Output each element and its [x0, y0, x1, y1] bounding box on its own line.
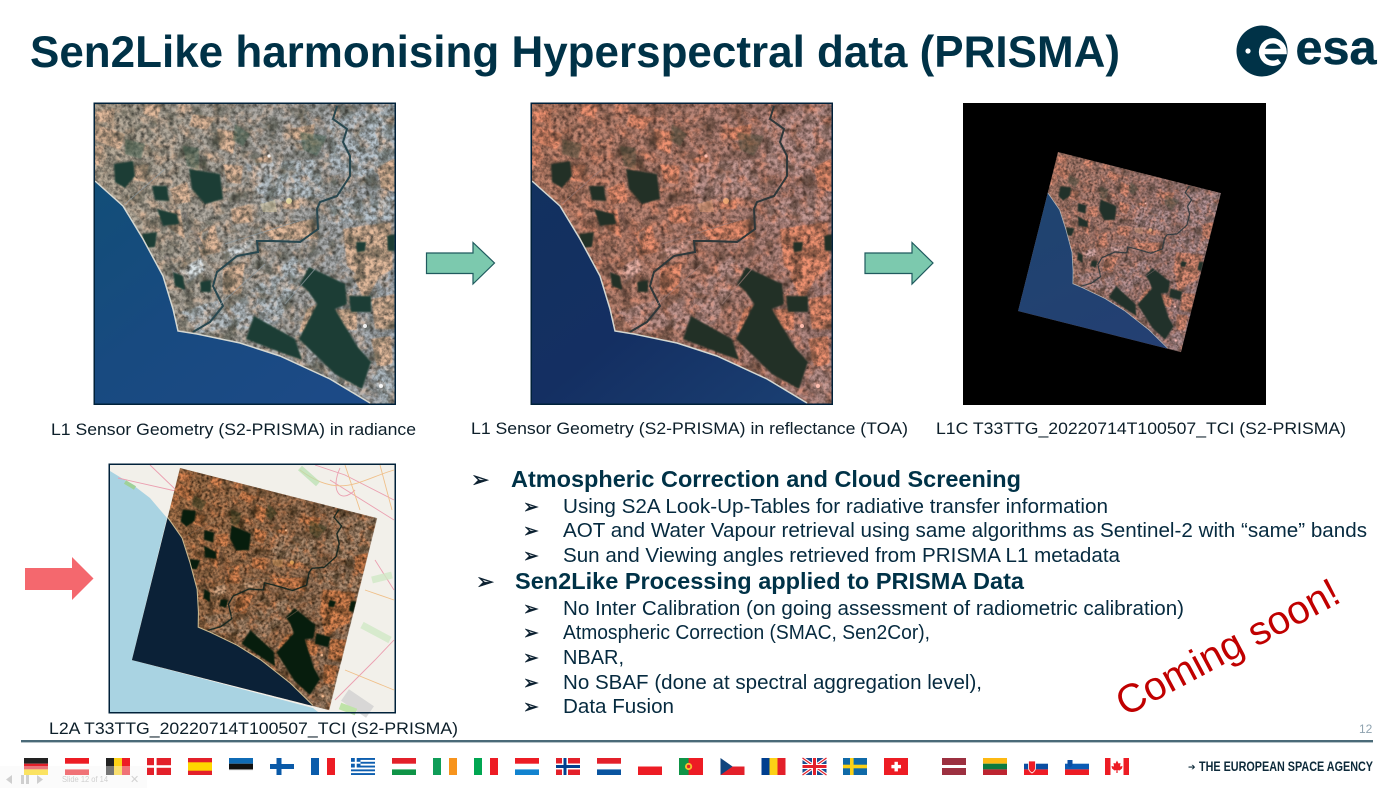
slide player controls: [0, 766, 147, 788]
flag: Greece: [351, 758, 375, 775]
page number: 12: [1359, 722, 1373, 736]
item: angles: ➢: [523, 545, 539, 567]
footer: The European Space Agency: ➔: [1188, 763, 1196, 773]
caption: L2A: L2A T33TTG_20220714T100507_TCI (S2-PRISMA): [49, 720, 458, 738]
item: inter calibration: No Inter Calibration (on going assessment of radiometric calibration): [563, 598, 1184, 620]
flag: Hungary: [392, 758, 416, 775]
footer rule: [21, 740, 1373, 742]
heading: Sen2Like Processing: ➢: [476, 570, 494, 595]
item: NBAR: NBAR,: [563, 647, 624, 669]
item: look-up tables: Using S2A Look-Up-Tables for radiative transfer information: [563, 496, 1108, 518]
icon: ESA logo: esa: [1296, 22, 1377, 75]
slide player controls: ✕: [130, 773, 139, 786]
flag: Austria: [65, 758, 89, 775]
slide player controls: Slide 12 of 14: [62, 774, 108, 784]
flag: Belgium: [106, 758, 130, 775]
icon: ESA logo: [1236, 22, 1377, 76]
flag: Italy: [474, 758, 498, 775]
flag: Germany: [24, 758, 48, 775]
caption: L1C: L1C T33TTG_20220714T100507_TCI (S2-PRISMA): [936, 420, 1346, 438]
arrow: red pointer to L2A: [25, 557, 94, 600]
caption: L1 radiance: L1 Sensor Geometry (S2-PRISMA) in radiance: [51, 421, 416, 439]
flag: Romania: [762, 758, 786, 775]
flag: Luxembourg: [515, 758, 539, 775]
flag: Sweden: [843, 758, 867, 775]
heading: Sen2Like Processing: Sen2Like Processing applied to PRISMA Data: [515, 568, 1024, 594]
flag: Poland: [638, 766, 662, 775]
item: AOT and water vapour: ➢: [523, 520, 539, 542]
flag: Czech Republic: [720, 758, 744, 775]
flag: Lithuania: [983, 758, 1007, 775]
flag: Latvia: [942, 758, 966, 775]
title: Sen2Like harmonising Hyperspectral data (PRISMA): [30, 28, 1120, 77]
arrow: reflectance to L1C: [865, 242, 933, 284]
callout: coming soon: Coming soon!: [1109, 570, 1347, 725]
flag: United Kingdom: [802, 758, 826, 775]
flag: Ireland: [433, 758, 457, 775]
item: look-up tables: ➢: [523, 496, 539, 518]
flag: Slovakia: [1024, 761, 1048, 775]
map sea: [110, 471, 318, 712]
item: angles: Sun and Viewing angles retrieved from PRISMA L1 metadata: [563, 545, 1121, 567]
flags row: [24, 758, 1129, 775]
item: AOT and water vapour: AOT and Water Vapour retrieval using same algorithms as Sentinel-2 with “same” bands: [563, 520, 1367, 542]
item: atmospheric correction: ➢: [523, 622, 539, 644]
flag: Estonia: [229, 758, 253, 770]
flag: Slovenia: [1065, 760, 1089, 775]
item: data fusion: Data Fusion: [563, 696, 674, 718]
flag: Norway: [556, 758, 580, 775]
arrow: radiance to reflectance: [426, 242, 494, 284]
map land and roads: [118, 465, 394, 712]
flag: Canada: [1105, 758, 1129, 775]
heading: Atmospheric Correction: Atmospheric Correction and Cloud Screening: [511, 466, 1021, 492]
satellite image: L1C rotated on black: [963, 103, 1266, 405]
flag: Denmark: [147, 758, 171, 775]
flag: Spain: [188, 758, 212, 775]
item: NBAR: [523, 647, 624, 669]
satellite image: L1 reflectance: [531, 103, 832, 404]
item: data fusion: ➢: [523, 696, 539, 718]
heading: Atmospheric Correction: ➢: [471, 468, 489, 493]
item: atmospheric correction: Atmospheric Correction (SMAC, Sen2Cor),: [563, 622, 930, 644]
flag: France: [311, 758, 335, 775]
satellite image: L2A on map: [109, 464, 395, 713]
bullet list: atmospheric correction and processing: [471, 466, 1367, 718]
item: SBAF: ➢: [523, 672, 539, 694]
flag: Finland: [270, 758, 294, 775]
flag: Portugal: [679, 758, 703, 775]
caption: L1 reflectance: L1 Sensor Geometry (S2-PRISMA) in reflectance (TOA): [471, 420, 908, 438]
item: inter calibration: ➢: [523, 598, 539, 620]
flag: Switzerland: [884, 758, 908, 775]
satellite image: L1 radiance: [94, 103, 395, 404]
item: NBAR: ➢: [523, 647, 539, 669]
flag: Netherlands: [597, 758, 621, 775]
item: SBAF: No SBAF (done at spectral aggregation level),: [563, 672, 982, 694]
